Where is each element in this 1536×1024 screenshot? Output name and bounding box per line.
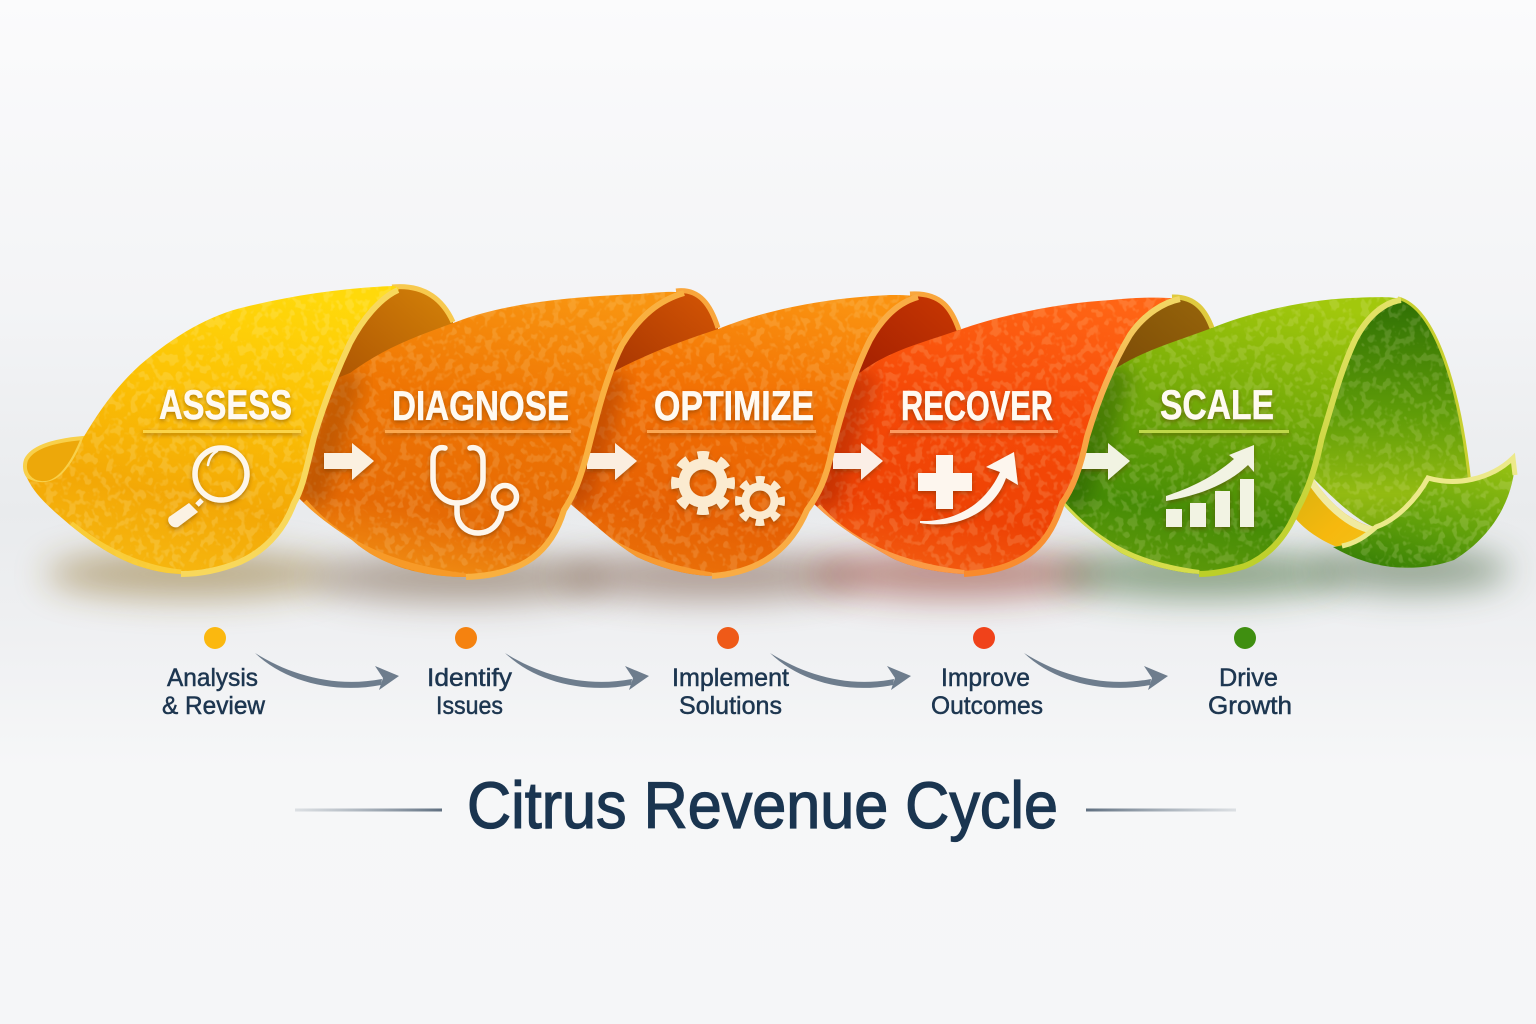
step: optimize note: [672, 627, 789, 720]
lime interior: [1314, 296, 1471, 526]
title: [295, 768, 1236, 842]
red front surface: [805, 290, 1185, 580]
label: drive growth: Drive: [1219, 664, 1278, 692]
step: recover note: [931, 627, 1043, 720]
label: identify issues: Issues: [436, 692, 503, 720]
pale pith band: [1310, 480, 1376, 530]
flow arrow 3: [770, 653, 911, 690]
label: improve outcomes: Improve: [941, 664, 1030, 692]
peel ground shadows: [45, 548, 1510, 602]
dot: green: [1234, 627, 1256, 649]
heading: assess: [143, 381, 301, 433]
label: analysis and review: & Review: [162, 692, 266, 720]
heading: diagnose: DIAGNOSE: [392, 382, 569, 429]
panel: scale lime peel with lip: [1050, 290, 1520, 580]
title: Citrus Revenue Cycle: [467, 768, 1058, 842]
heading: recover: RECOVER: [901, 382, 1053, 429]
heading: assess: ASSESS: [159, 381, 292, 428]
lime front surface: [1050, 290, 1410, 580]
arrow: recover to scale: [1080, 443, 1130, 480]
heading: optimize: OPTIMIZE: [654, 382, 814, 429]
panel: recover red peel: [805, 290, 1185, 580]
label: implement solutions: Solutions: [679, 692, 782, 720]
arrow: optimize to recover: [833, 443, 883, 480]
lime yellow underside: [1295, 477, 1376, 547]
label: analysis and review: Analysis: [167, 664, 258, 692]
panel: optimize orange peel: [555, 290, 925, 580]
orange front surface: [290, 288, 690, 580]
panel: assess yellow peel: [22, 284, 402, 576]
label: drive growth: Growth: [1208, 692, 1292, 720]
icon: gears: [676, 456, 782, 522]
step: scale note: [1208, 627, 1292, 720]
flow arrow 1: [255, 653, 399, 690]
icon: stethoscope: [433, 448, 516, 533]
label: improve outcomes: Outcomes: [931, 692, 1043, 720]
arrow: assess to diagnose: [324, 443, 374, 480]
lemon curl interior: [25, 438, 83, 483]
label: identify issues: Identify: [427, 664, 513, 692]
dot: yellow: [204, 627, 226, 649]
step: diagnose note: [427, 627, 513, 720]
heading: recover: [890, 382, 1058, 433]
lime front lip: [1330, 455, 1520, 575]
arrow: diagnose to optimize: [587, 443, 637, 480]
flow arrow 2: [505, 653, 649, 690]
yellow front surface: [22, 284, 402, 576]
heading: scale: SCALE: [1160, 381, 1274, 428]
icon: magnifying glass: [168, 448, 247, 527]
dot: deep orange: [717, 627, 739, 649]
dot: red: [973, 627, 995, 649]
icon: medical plus with rising arrow: [918, 452, 1018, 524]
panel: diagnose orange peel: [290, 288, 690, 580]
orange front surface: [555, 290, 925, 580]
label: implement solutions: Implement: [672, 664, 789, 692]
dot: orange: [455, 627, 477, 649]
peel interiors behind the fronts: [320, 287, 1212, 470]
flow arrow 4: [1024, 653, 1168, 690]
icon: growth chart: [1166, 445, 1254, 527]
step: assess note: [162, 627, 266, 720]
